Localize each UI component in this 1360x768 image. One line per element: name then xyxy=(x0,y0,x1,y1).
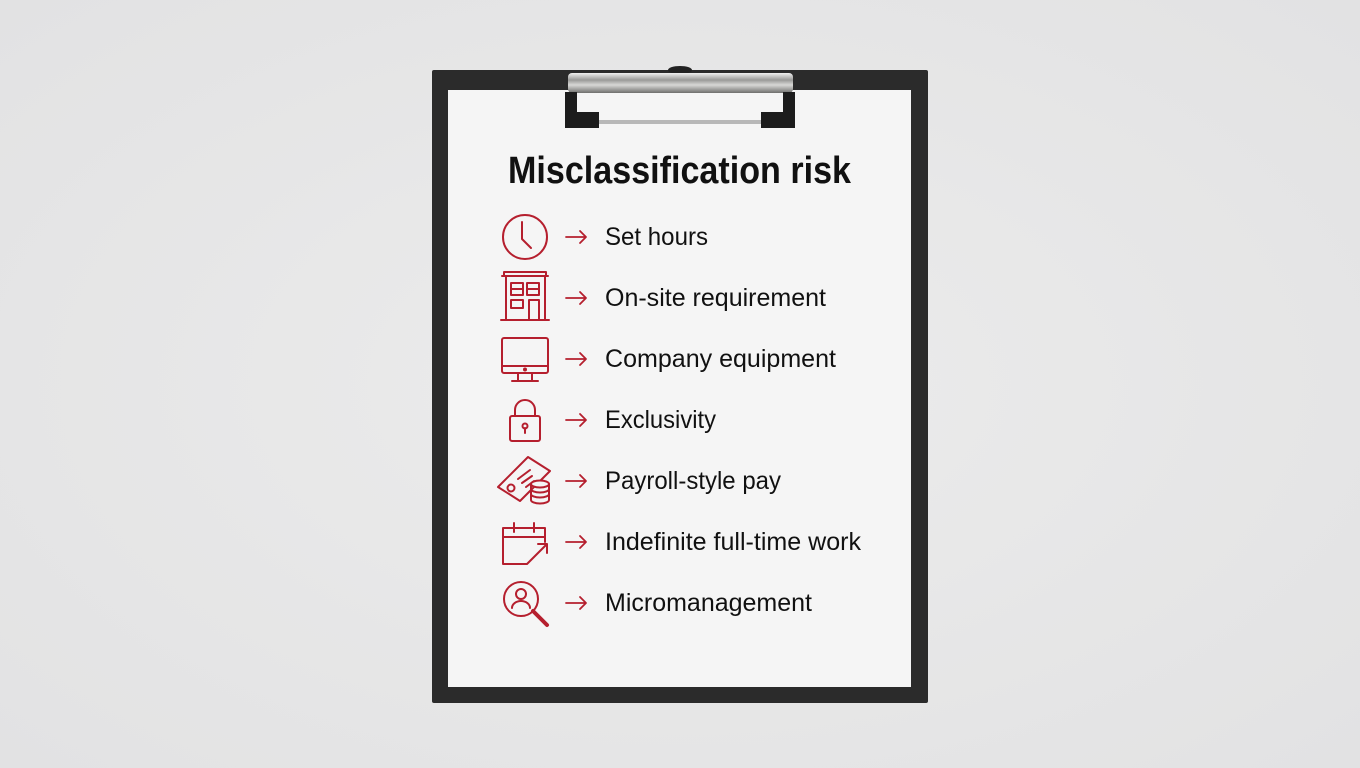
item labels xyxy=(605,223,861,617)
item labels: Exclusivity xyxy=(605,406,716,434)
item labels: Payroll-style pay xyxy=(605,467,781,495)
item labels: Micromanagement xyxy=(605,589,812,617)
clip xyxy=(565,66,795,128)
item labels: Indefinite full-time work xyxy=(605,528,861,556)
icon: monitor xyxy=(502,338,548,381)
icon: cheque and coins xyxy=(498,457,550,504)
list of risk items xyxy=(498,215,586,625)
item labels: Company equipment xyxy=(605,345,836,373)
icon: user magnifier xyxy=(504,582,547,625)
paper xyxy=(448,90,911,687)
icon: building xyxy=(501,272,549,320)
item labels: Set hours xyxy=(605,223,708,251)
title: Misclassification risk xyxy=(508,150,852,192)
icon: clock xyxy=(503,215,547,259)
arrows xyxy=(566,231,586,609)
icon: padlock xyxy=(510,400,540,441)
clipboard xyxy=(432,66,928,703)
icon: calendar xyxy=(503,523,547,564)
item labels: On-site requirement xyxy=(605,284,826,312)
